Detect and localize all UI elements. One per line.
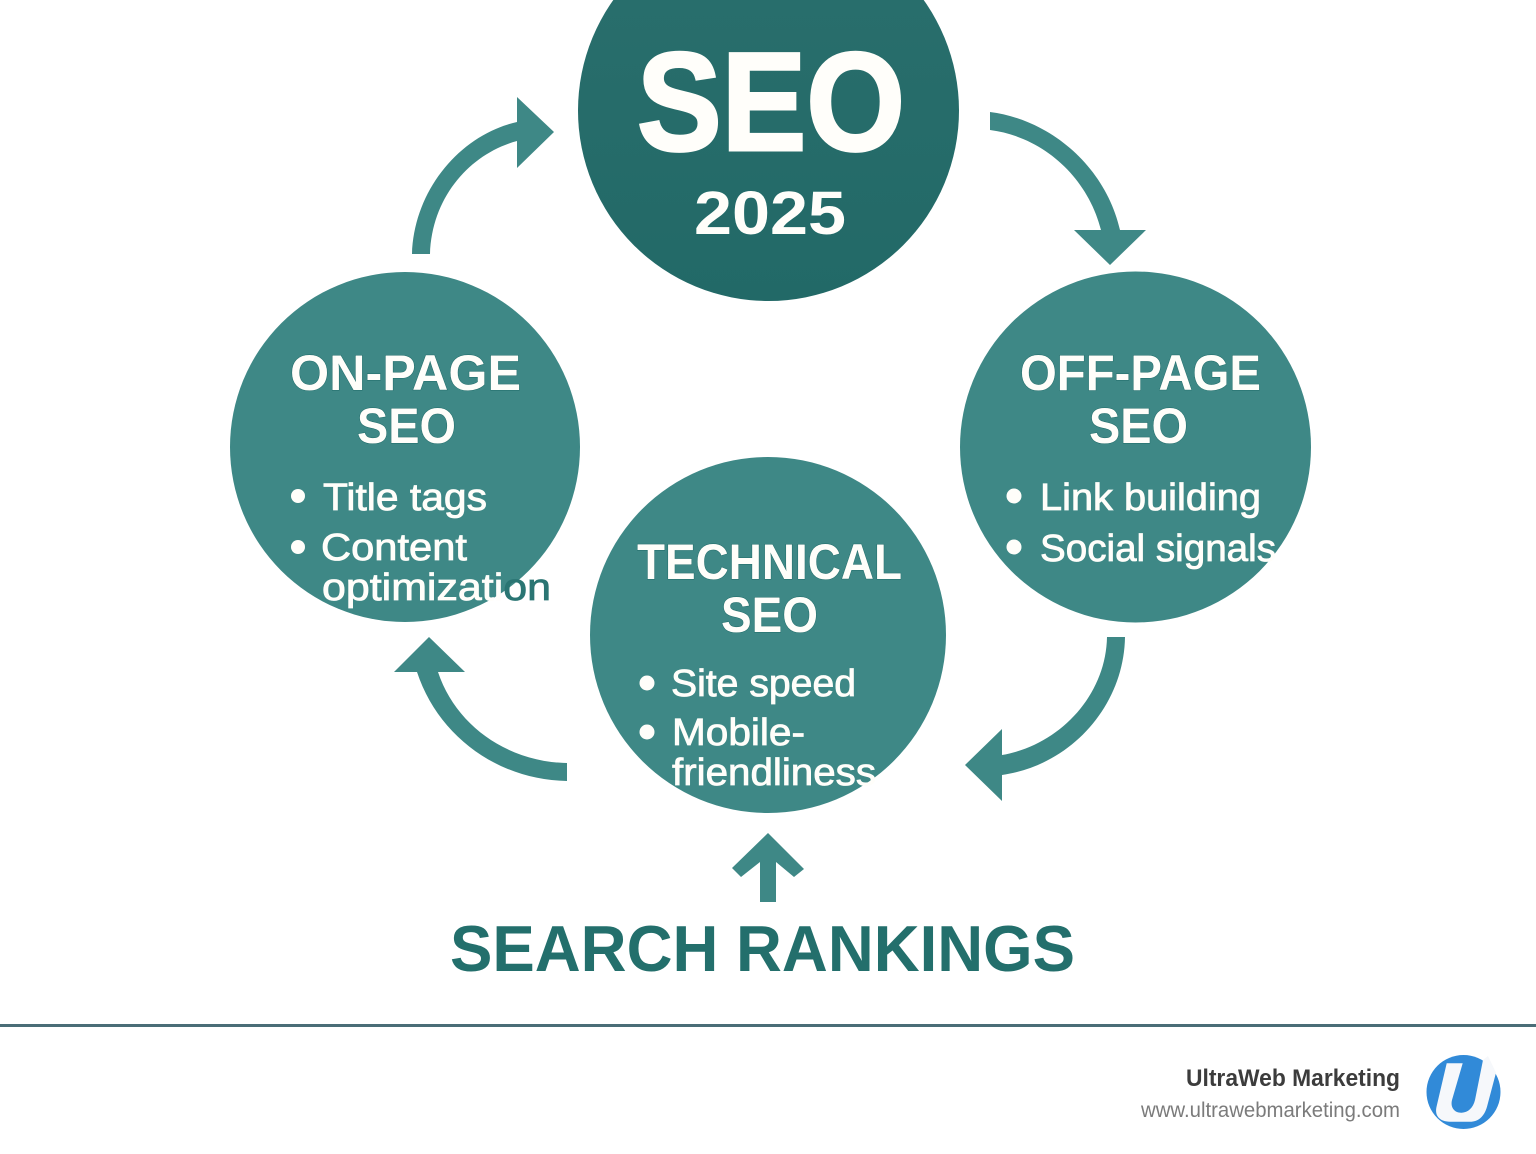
panel: on-page SEO — [230, 272, 580, 622]
heading: seo: SEO — [721, 587, 818, 643]
panel: technical SEO — [590, 457, 946, 813]
heading: off-page: OFF-PAGE — [1020, 345, 1261, 401]
arrow: up to technical — [732, 833, 804, 902]
arrow: technical to on-page — [394, 637, 567, 781]
heading: seo: SEO — [357, 398, 456, 454]
subtitle: 2025: 2025 — [694, 179, 846, 247]
item: friendliness: friendliness — [672, 752, 876, 794]
bullet — [1006, 488, 1022, 504]
heading: technical: TECHNICAL — [637, 534, 902, 590]
item: site speed: Site speed — [671, 663, 856, 705]
footer url: www.ultrawebmarketing.com — [1140, 1099, 1400, 1122]
panel: off-page SEO — [960, 272, 1311, 622]
item: mobile-: Mobile- — [672, 712, 805, 754]
title: SEO: SEO — [637, 23, 905, 180]
arrow: off-page to technical — [965, 637, 1125, 801]
heading: on-page: ON-PAGE — [290, 345, 521, 401]
item: title tags: Title tags — [323, 477, 487, 519]
bullet — [640, 724, 654, 740]
bullet — [1006, 540, 1022, 554]
item: optimization: optimizati on — [322, 567, 551, 609]
item: content: Content — [321, 527, 467, 569]
bullet — [291, 489, 305, 503]
heading: search rankings: SEARCH RANKINGS — [450, 912, 1075, 985]
arrow: on-page to hub — [412, 97, 554, 254]
footer brand name: UltraWeb Marketing — [1186, 1065, 1400, 1092]
bullet — [640, 676, 654, 690]
arrow: hub to off-page — [990, 112, 1146, 265]
footer divider — [0, 1024, 1536, 1027]
heading: seo: SEO — [1089, 398, 1188, 454]
icon: UltraWeb logo — [1426, 1055, 1500, 1129]
panel: SEO 2025 hub — [578, 0, 959, 301]
item: link building: Link building — [1040, 477, 1261, 519]
bullet — [291, 540, 305, 554]
item: social signals: Social signals — [1040, 528, 1276, 570]
